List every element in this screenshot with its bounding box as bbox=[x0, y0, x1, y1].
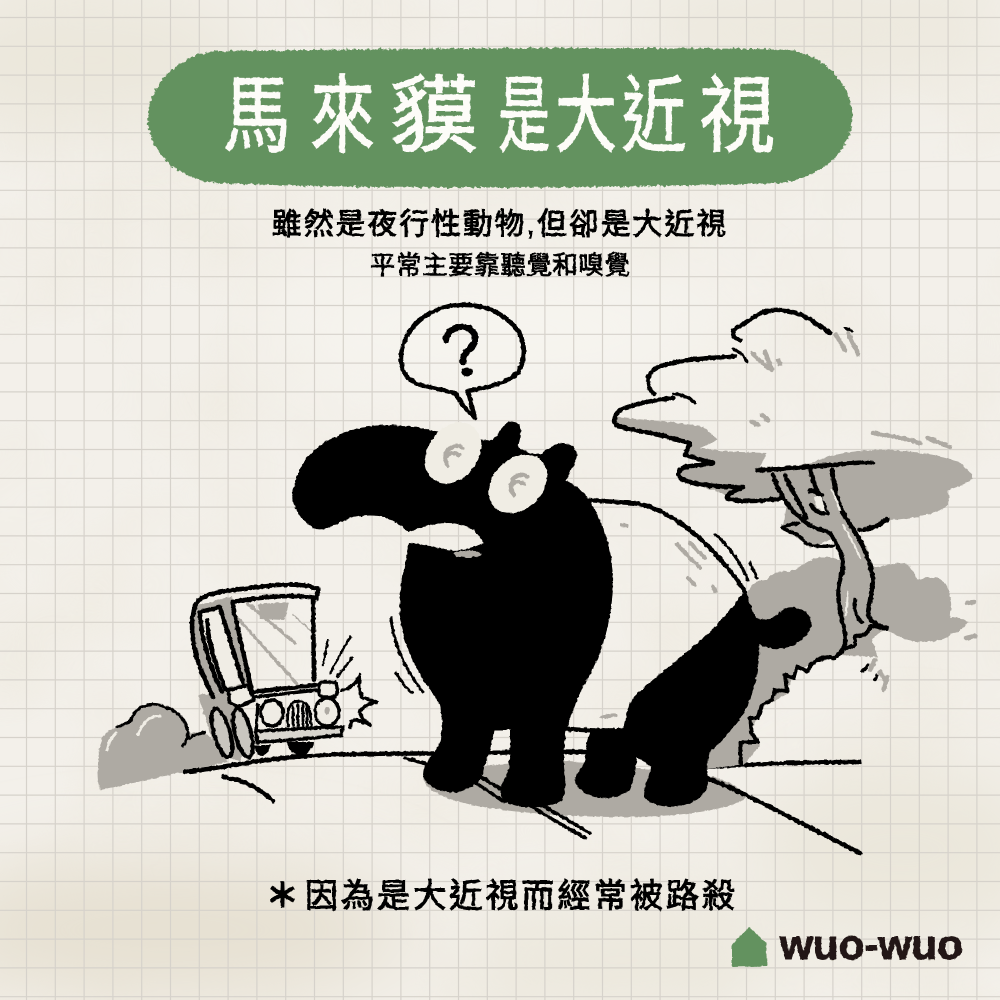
title text: 來 bbox=[310, 69, 375, 163]
title text: 是 bbox=[498, 69, 550, 163]
side wheels bbox=[207, 707, 257, 759]
mouth shadow bbox=[454, 550, 482, 558]
windshield glare bbox=[258, 602, 289, 620]
logo wordmark: wuo-wuo bbox=[779, 921, 963, 968]
front wheel bbox=[254, 742, 314, 756]
eye left bbox=[414, 412, 492, 494]
road edges bbox=[223, 777, 860, 853]
title text: 近 bbox=[622, 69, 686, 163]
bumper bbox=[256, 727, 343, 742]
footnote line: 因為是大近視而經常被路殺 bbox=[305, 877, 735, 914]
tapir bbox=[292, 412, 811, 807]
title text: 視 bbox=[699, 69, 775, 163]
lane dashes bbox=[405, 758, 590, 838]
speech bubble bbox=[401, 305, 524, 418]
tapir back and belly outline bbox=[560, 500, 745, 731]
question mark bbox=[446, 327, 475, 376]
fender bbox=[229, 685, 254, 707]
tapir head and front body bbox=[292, 422, 613, 807]
jagged grass edge bbox=[740, 626, 887, 763]
pale shade strokes bbox=[752, 333, 975, 690]
tapir rear bbox=[575, 590, 811, 807]
eye right bbox=[477, 443, 559, 525]
trunk bbox=[773, 470, 887, 655]
bus outline bbox=[192, 585, 318, 697]
bush behind tree bbox=[700, 557, 968, 770]
title text: 貘 bbox=[390, 69, 478, 163]
canopy shading bbox=[616, 417, 973, 548]
dust cloud behind bus bbox=[98, 703, 227, 790]
title banner bbox=[148, 48, 852, 188]
bus bbox=[192, 585, 343, 762]
tapir ground shadow bbox=[423, 760, 748, 817]
tree bbox=[615, 310, 975, 770]
illustration bbox=[98, 305, 975, 853]
title text: 大 bbox=[555, 69, 617, 163]
canopy outline bbox=[615, 310, 887, 530]
subtitle line 2: 平常主要靠聽覺和嗅覺 bbox=[370, 252, 630, 280]
bus side shading bbox=[192, 596, 252, 762]
grass dashes bbox=[862, 665, 877, 680]
logo bbox=[732, 921, 963, 968]
road bbox=[185, 752, 860, 853]
title text bbox=[223, 69, 775, 163]
green brush pill bbox=[148, 48, 852, 188]
crash star bbox=[342, 675, 377, 727]
title text: 馬 bbox=[223, 69, 291, 163]
subtitle line 1: 雖然是夜行性動物,但卻是大近視 bbox=[272, 208, 726, 241]
headlights and grille bbox=[255, 682, 339, 732]
pale body marks bbox=[602, 525, 715, 717]
horizon line bbox=[185, 752, 860, 772]
footnote line: ＊ bbox=[266, 877, 299, 914]
impact burst lines bbox=[323, 637, 352, 677]
logo house icon bbox=[732, 927, 767, 967]
motion lines bbox=[391, 535, 757, 693]
